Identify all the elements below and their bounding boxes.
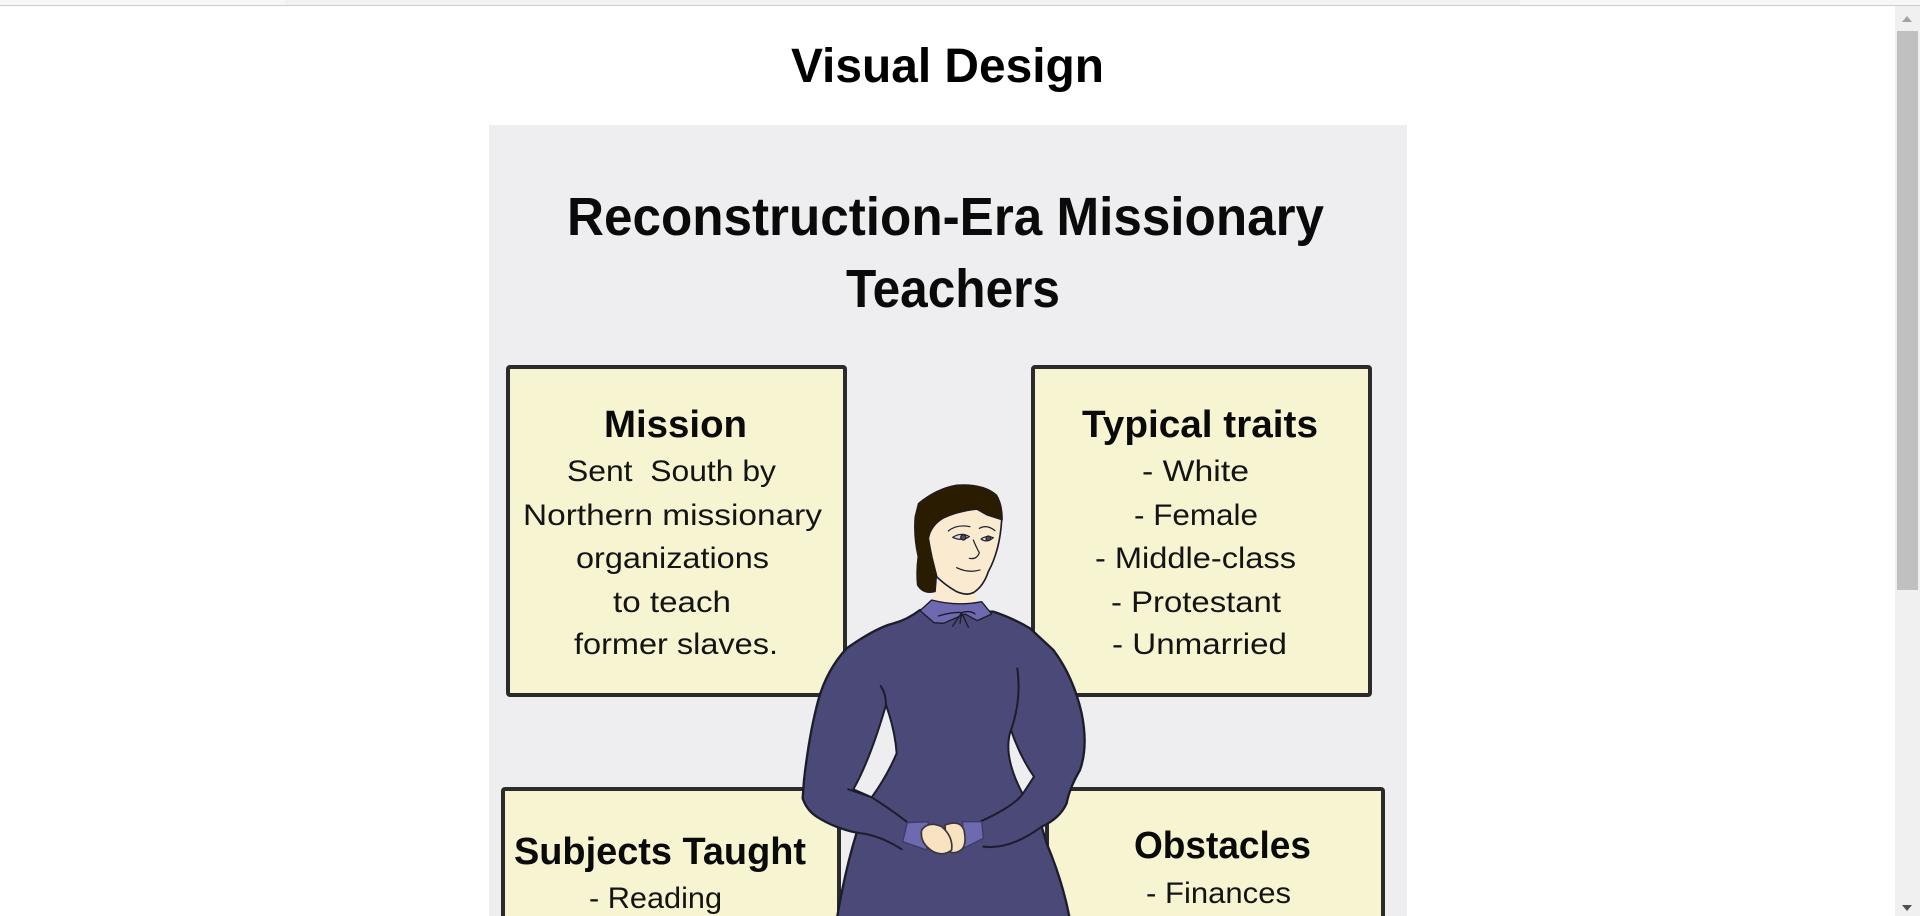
box: Mission: Northern missionary: [523, 499, 822, 532]
box: Mission: Sent South by: [567, 455, 776, 488]
box: Typical traits: - Middle-class: [1095, 542, 1296, 575]
box: Mission: organizations: [576, 542, 769, 575]
scrollbar: [1895, 6, 1920, 916]
box: Mission: former slaves.: [574, 628, 778, 661]
box: Obstacles: [1047, 789, 1383, 916]
box: Typical traits: Typical traits: [1082, 404, 1318, 446]
hands: [921, 823, 965, 854]
hair: [915, 485, 1002, 592]
box: Typical traits: - White: [1142, 455, 1249, 488]
box: Typical traits: - Unmarried: [1112, 628, 1287, 661]
arm gaps: [853, 705, 1034, 797]
eyes, nose, mouth: [948, 526, 995, 571]
cuffs: [903, 822, 983, 850]
bow tie: [938, 612, 975, 627]
box: Typical traits: - Female: [1134, 499, 1258, 532]
box: Subjects Taught: - Reading: [589, 882, 722, 915]
browser top bar: [0, 0, 1920, 6]
box: Mission: to teach: [613, 586, 731, 619]
illustration: missionary teacher: [803, 485, 1085, 916]
collar: [920, 600, 992, 623]
box: Obstacles: - Finances: [1146, 877, 1291, 910]
neck: [933, 582, 977, 604]
box: Mission: [508, 367, 845, 695]
infographic title: [567, 187, 1324, 319]
face: [928, 500, 1002, 594]
dress folds: [848, 668, 1042, 849]
dress: [803, 610, 1085, 916]
infographic panel: [489, 125, 1407, 916]
box: Obstacles: Obstacles: [1134, 825, 1311, 867]
infographic title: Reconstruction-Era Missionary: [567, 187, 1324, 247]
page heading: Visual Design: [791, 40, 1104, 93]
infographic title: Teachers: [846, 259, 1060, 319]
box: Mission: Mission: [604, 404, 747, 446]
box: Subjects Taught: [503, 789, 839, 916]
box: Typical traits: [1033, 367, 1370, 695]
box: Subjects Taught: Subjects Taught: [514, 831, 806, 873]
box: Typical traits: - Protestant: [1111, 586, 1282, 619]
